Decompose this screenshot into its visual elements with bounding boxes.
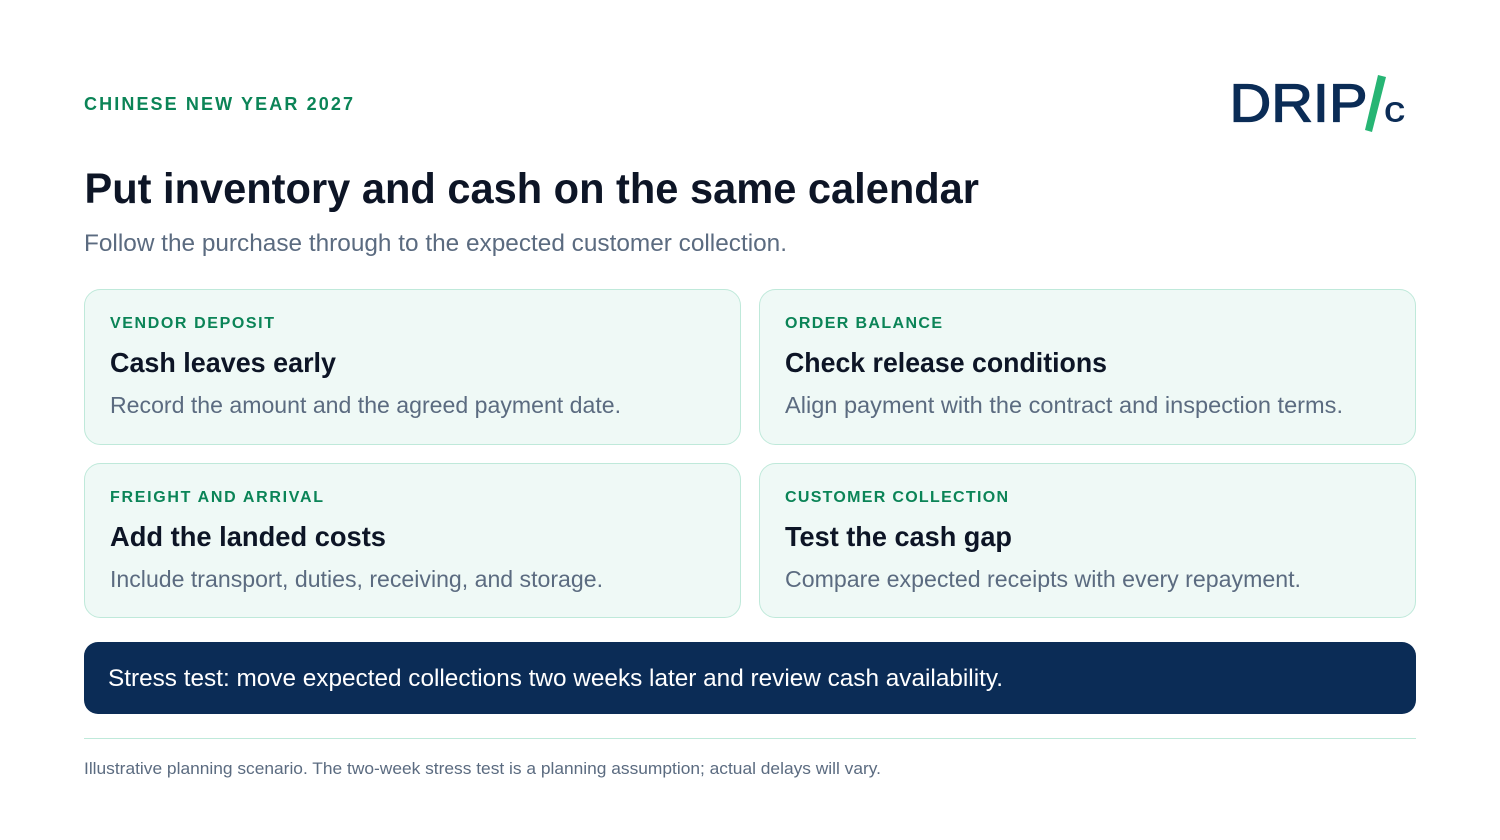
footnote: Illustrative planning scenario. The two-week stress test is a planning assumption; actual delays will vary. [84,759,881,778]
panel: vendor deposit: VENDOR DEPOSIT [110,315,274,332]
callout: stress test [84,642,1416,714]
panel: order balance: Align payment with the contract and inspection terms. [785,392,1343,418]
title: Put inventory and cash on the same calendar [84,165,979,213]
panel: freight and arrival: FREIGHT AND ARRIVAL [110,489,323,506]
panel: freight and arrival [84,464,740,618]
panel: customer collection: CUSTOMER COLLECTION [785,489,1008,506]
panel: freight and arrival: Add the landed costs [110,521,386,552]
panel: vendor deposit: Cash leaves early [110,347,336,378]
panel: customer collection [760,464,1416,618]
callout: stress test: Stress test: move expected collections two weeks later and review cash availability. [108,665,1003,692]
panel: customer collection: Compare expected receipts with every repayment. [785,566,1301,592]
panel: order balance: Check release conditions [785,347,1107,378]
logo: DRIP/c: DRIP [1230,74,1368,134]
panel: customer collection: Test the cash gap [785,521,1012,552]
eyebrow: CHINESE NEW YEAR 2027 [84,94,353,114]
panel: vendor deposit: Record the amount and the agreed payment date. [110,392,621,418]
panel: order balance: ORDER BALANCE [785,315,942,332]
panel: freight and arrival: Include transport, duties, receiving, and storage. [110,566,603,592]
subtitle: Follow the purchase through to the expected customer collection. [84,230,787,257]
panel: order balance [760,290,1416,444]
panel: vendor deposit [84,290,740,444]
logo: DRIP/c: c [1384,88,1405,130]
